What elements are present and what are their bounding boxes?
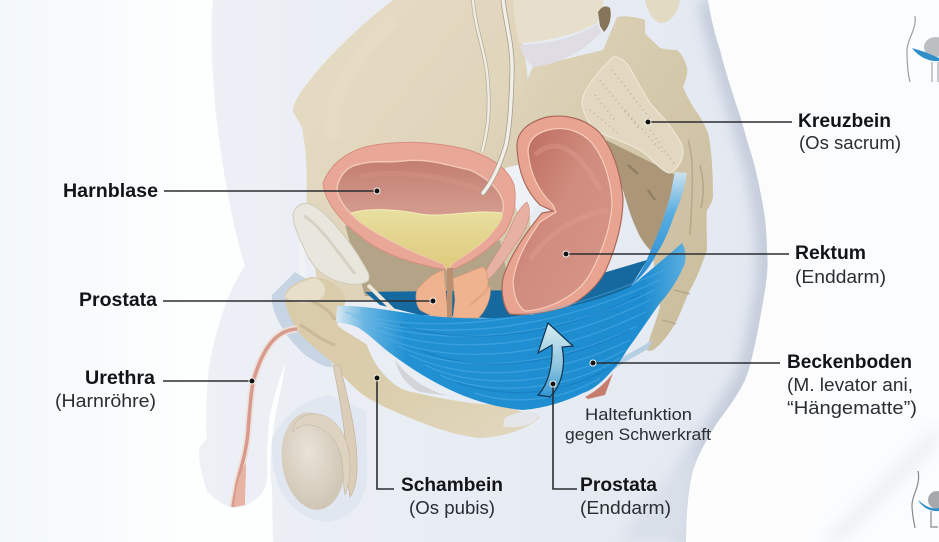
label: Kreuzbein: Kreuzbein — [798, 110, 891, 132]
label: Kreuzbein — [645, 110, 901, 153]
label: Beckenboden: Beckenboden — [787, 351, 912, 373]
label: Urethra: (Harnröhre) — [55, 390, 156, 411]
rectum — [502, 116, 623, 315]
body silhouette — [199, 0, 768, 542]
ilium: hip bone — [293, 0, 530, 300]
urethra — [233, 329, 297, 507]
lumbar vertebra and disc — [513, 0, 680, 67]
label: Urethra — [55, 367, 255, 411]
labels and leader lines — [55, 110, 917, 518]
blue strip on coccyx — [630, 172, 687, 287]
arrow: upward support force — [538, 323, 573, 397]
levator ani muscle — [336, 243, 686, 410]
label: Haltefunktion: Haltefunktion — [585, 406, 692, 424]
icon: small body diagram top right — [907, 16, 939, 82]
label: Harnblase — [63, 180, 380, 202]
seminal vesicle — [482, 202, 530, 281]
pale shadow around pubic bone — [272, 272, 340, 367]
prostate gland — [416, 267, 490, 318]
label: Beckenboden: “Hängematte”) — [787, 397, 917, 418]
label: Beckenboden — [590, 351, 917, 418]
label: Prostata left — [79, 289, 436, 311]
bladder — [323, 142, 515, 270]
scrotum envelope — [272, 395, 367, 522]
label: Prostata bottom: Prostata — [580, 474, 657, 496]
pubic bone — [285, 277, 540, 438]
ligament and tissue under muscle — [395, 340, 653, 399]
label: Rektum: Rektum — [795, 242, 866, 264]
label: Rektum — [563, 242, 886, 287]
label: Prostata bottom: (Enddarm) — [580, 497, 671, 518]
label: Prostata bottom — [550, 381, 671, 518]
pubic symphysis cartilage — [293, 203, 395, 312]
testis and spermatic cord — [275, 365, 357, 514]
label: Haltefunktion: gegen Schwerkraft — [565, 426, 711, 444]
deep pelvic floor: dark blue — [365, 260, 647, 320]
label: Prostata left: Prostata — [79, 289, 157, 311]
label: Beckenboden: (M. levator ani, — [787, 374, 913, 395]
label: Schambein — [374, 375, 503, 518]
gap between bladder and rectum — [505, 164, 538, 226]
label: Schambein: (Os pubis) — [409, 497, 495, 518]
sacrum and coccyx — [526, 16, 713, 351]
ureter tubes — [473, 0, 512, 193]
label: Schambein: Schambein — [401, 474, 503, 496]
icon: small body diagram bottom right — [820, 423, 939, 542]
label: Haltefunktion — [565, 406, 711, 444]
label: Rektum: (Enddarm) — [795, 266, 886, 287]
label: Urethra: Urethra — [85, 367, 155, 389]
label: Kreuzbein: (Os sacrum) — [799, 132, 901, 153]
label: Harnblase: Harnblase — [63, 180, 158, 202]
